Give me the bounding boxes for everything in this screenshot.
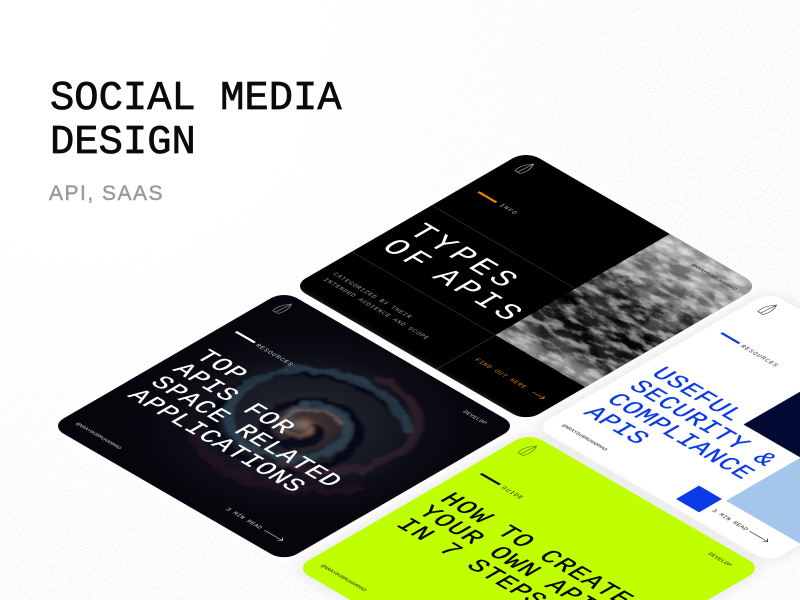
call to action (473, 358, 547, 400)
card heading: SECURITY & (621, 377, 784, 471)
topic label: DEVELOP (461, 409, 489, 426)
blue square (676, 486, 722, 512)
card heading: OF APIS (372, 235, 533, 328)
read time: 3 MIN READ (224, 507, 264, 530)
card: useful security (529, 288, 800, 566)
topic label: DEVELOP (706, 551, 734, 568)
logo icon (514, 162, 536, 174)
category tag (475, 190, 519, 216)
read time: 3 MIN READ (710, 508, 750, 532)
handle: @NRAYOUBMUHAMMAD (74, 422, 123, 451)
subtitle: API, SAAS (49, 182, 164, 205)
logo icon (757, 303, 779, 315)
card heading: APIS FOR (165, 359, 302, 439)
description: CATEGORIZED BY THEIR (331, 272, 414, 320)
category tag: RESOURCES (253, 343, 295, 367)
category tag (717, 332, 780, 368)
card heading: COMPLIANCE (599, 390, 761, 484)
handle: @NRAYOUBMUHAMMAD (319, 564, 368, 593)
card heading: USEFUL (644, 363, 751, 426)
title: SOCIAL MEDIA (50, 76, 342, 122)
navy image (744, 382, 800, 501)
card heading: APIS (576, 403, 656, 449)
cloud photo (496, 234, 760, 387)
category tag: GUIDE (499, 486, 525, 501)
card heading (120, 346, 394, 505)
category tag: INFO (497, 203, 519, 216)
handle: @NRAYOUBMUHAMMAD (560, 424, 609, 452)
card: types of APIs (288, 148, 764, 424)
divider lines (292, 205, 576, 370)
category tag (477, 472, 525, 501)
category tag (232, 330, 295, 367)
handle: @NRAYOUBMUHAMMAD (689, 263, 738, 292)
card: how to create (289, 429, 769, 600)
galaxy image (178, 331, 465, 518)
light blue block (726, 458, 800, 544)
read time (710, 508, 770, 544)
category tag: RESOURCES (738, 344, 780, 368)
logo icon (272, 302, 294, 314)
card heading: TYPES (398, 220, 529, 295)
card heading (576, 363, 800, 497)
card heading: APPLICATIONS (120, 385, 313, 497)
card: top APIs galaxy (58, 290, 520, 559)
card heading: SPACE RELATED (143, 372, 349, 492)
read time (224, 507, 285, 543)
call to action: FIND OUT HERE (473, 358, 529, 390)
description: INTENDED AUDIENCE AND SCOPE (321, 277, 431, 341)
card heading: TOP (188, 346, 255, 385)
logo icon (517, 444, 539, 456)
title second line: DESIGN (50, 120, 196, 166)
